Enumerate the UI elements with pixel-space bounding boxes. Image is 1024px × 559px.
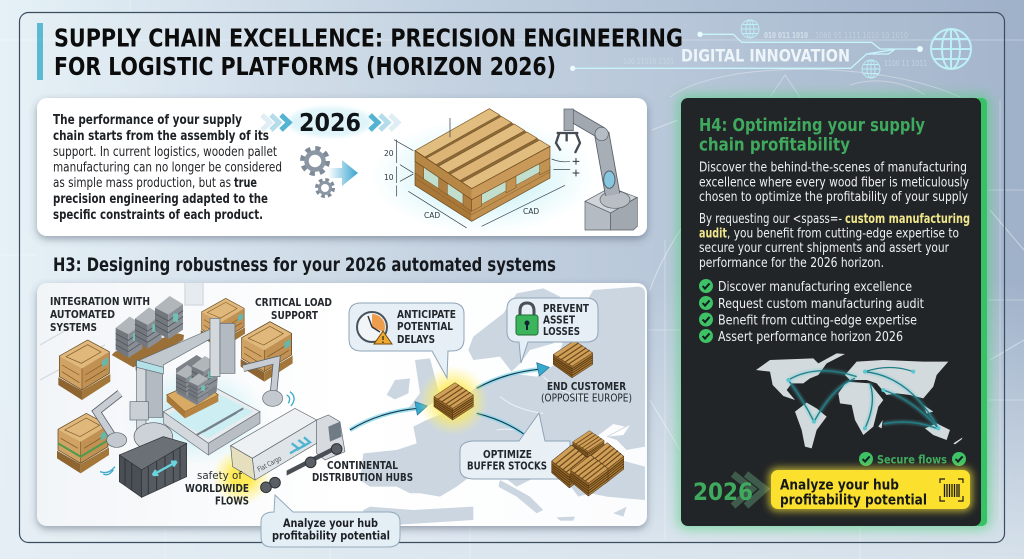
right robot base	[263, 390, 283, 406]
call to action button: Analyze your hub	[780, 478, 899, 494]
dimension labels: 20	[384, 149, 394, 158]
label: continental distribution hubs: DISTRIBUTION HUBS	[312, 472, 413, 484]
left robot base	[107, 433, 127, 447]
intro text block: manufacturing can no longer be considered	[53, 160, 282, 176]
paragraph: audit: performance for the 2026 horizon.	[699, 256, 884, 271]
green year 2026: 2026	[693, 478, 753, 506]
intro text block: The performance of your supply	[53, 112, 242, 128]
yellow glow behind truck	[212, 448, 272, 505]
checklist: Benefit from cutting-edge expertise	[718, 314, 917, 328]
paragraph: audit: , you benefit from cutting-edge expertise to	[727, 226, 959, 242]
label: end customer: (OPPOSITE EUROPE)	[541, 392, 632, 404]
paragraph: audit: custom manufacturing	[845, 212, 970, 227]
buffer stock pallets	[552, 431, 624, 496]
paragraph: audit	[699, 212, 970, 271]
robot arm	[556, 109, 637, 230]
paragraph: audit: secure your current shipments and assert your	[699, 241, 950, 256]
dimension labels: CAD	[424, 211, 440, 220]
label: continental distribution hubs: CONTINENTAL	[327, 460, 398, 472]
icon: barcode	[940, 479, 963, 501]
dimension labels: CAD	[523, 207, 539, 216]
heading H4: H4: Optimizing your supply	[699, 115, 925, 136]
intro text block: precision engineering adapted to the	[53, 191, 268, 207]
callout: optimize buffer stocks: OPTIMIZE	[483, 449, 532, 461]
paragraph: discover: excellence where every wood fiber is meticulously	[699, 176, 969, 190]
hub pallet with glow	[418, 366, 488, 436]
conveyor frame	[163, 387, 260, 455]
intro text block: support. In current logistics, wooden pallet	[53, 144, 277, 160]
callout: optimize buffer stocks: BUFFER STOCKS	[467, 460, 547, 472]
wifi icons	[100, 392, 294, 475]
digital innovation banner: 100 11010 1101	[623, 57, 674, 66]
intro text block: specific constraints of each product.	[53, 207, 263, 223]
end customer pallet	[553, 340, 593, 378]
panel: intro pallet engineering	[37, 98, 647, 236]
label: integration with automated systems: INTEGRATION WITH	[50, 296, 150, 308]
secure flows badge: Secure flows	[877, 452, 947, 466]
callout: analyze hub profitability: profitability potential	[272, 528, 390, 542]
label: safety of worldwide flows: FLOWS	[215, 496, 249, 508]
callout: anticipate potential delays: ANTICIPATE	[397, 309, 456, 321]
callout: prevent asset losses: ASSET	[543, 314, 576, 326]
intro text block: chain starts from the assembly of its	[53, 128, 269, 144]
callout: prevent asset losses: LOSSES	[543, 326, 580, 338]
label: end customer: END CUSTOMER	[547, 381, 626, 393]
icon: clock with warning	[357, 312, 392, 344]
gray goods pallet	[112, 296, 184, 367]
digital innovation banner: 010 011 1010	[764, 31, 808, 40]
label: critical load support: CRITICAL LOAD	[255, 297, 332, 309]
label: integration with automated systems: SYSTEMS	[50, 322, 97, 334]
label: critical load support	[255, 297, 332, 322]
europe map	[360, 287, 645, 525]
label: integration with automated systems: AUTOMATED	[50, 309, 115, 321]
dimension labels: 10	[384, 173, 394, 182]
wooden pallet technical drawing	[370, 109, 597, 235]
panel: H4 profitability	[678, 95, 990, 529]
callout: analyze hub profitability	[261, 495, 400, 547]
callout: anticipate potential delays: DELAYS	[397, 334, 435, 346]
digital innovation banner: 1100 11 1011	[884, 59, 927, 68]
paragraph: audit: By requesting our <spass=-	[699, 212, 842, 227]
digital innovation banner: DIGITAL INNOVATION	[681, 46, 850, 66]
heading H4	[699, 115, 925, 156]
label: critical load support: SUPPORT	[271, 310, 319, 322]
title: SUPPLY CHAIN EXCELLENCE: PRECISION ENGINEERING	[54, 24, 683, 52]
call to action button	[769, 468, 972, 511]
digital innovation banner: 1060 01 1111 1010 10 1010	[815, 31, 908, 40]
callout: prevent asset losses	[507, 298, 598, 363]
callout: prevent asset losses: PREVENT	[543, 303, 590, 315]
label: integration with automated systems	[50, 296, 150, 334]
intro text block	[53, 112, 282, 223]
callout: anticipate potential delays: POTENTIAL	[397, 321, 453, 333]
checklist: Discover manufacturing excellence	[718, 280, 912, 295]
panel: automated systems and european flows	[37, 283, 647, 526]
faint warehouse walls	[40, 283, 203, 380]
paragraph: audit: audit	[699, 226, 727, 242]
heading H3: H3: Designing robustness for your 2026 automated systems	[53, 254, 556, 276]
checklist	[699, 279, 924, 345]
truck label: Flat Cargo	[256, 454, 283, 474]
icon: padlock	[516, 303, 538, 335]
right robot arm	[243, 360, 277, 395]
title: FOR LOGISTIC PLATFORMS (HORIZON 2026)	[54, 52, 556, 81]
intro text block: true	[234, 175, 257, 191]
label: safety of worldwide flows	[185, 469, 249, 508]
digital innovation banner	[570, 20, 971, 78]
intro text block: as simple mass production, but as	[53, 175, 231, 191]
crate back	[201, 298, 245, 349]
year 2026 with chevrons: 2026	[299, 108, 361, 137]
automated warehouse scene	[57, 296, 345, 505]
central loaded pallet	[167, 355, 218, 418]
title	[37, 23, 683, 81]
year 2026 with chevrons	[262, 107, 398, 137]
left robot arm	[97, 393, 120, 440]
label: end customer	[541, 381, 632, 404]
gantry	[130, 318, 235, 451]
label: safety of worldwide flows: safety of	[197, 469, 243, 482]
checklist: Request custom manufacturing audit	[718, 297, 924, 312]
checklist: Assert performance horizon 2026	[718, 330, 903, 345]
callout: analyze hub profitability: Analyze your hub	[283, 516, 378, 530]
paragraph: discover: Discover the behind-the-scenes of manufacturing	[699, 160, 967, 176]
call to action button: profitability potential	[780, 492, 927, 508]
world map with flows	[756, 353, 963, 448]
icon: gears and arrow	[302, 148, 358, 196]
delivery truck	[231, 408, 345, 493]
callout: optimize buffer stocks	[460, 413, 570, 479]
crates	[58, 340, 110, 400]
heading H4: chain profitability	[699, 134, 850, 156]
flow arrows	[350, 363, 549, 440]
label: safety of worldwide flows: WORLDWIDE	[185, 483, 249, 495]
paragraph: discover	[699, 160, 969, 205]
paragraph: discover: chosen to optimize the profitability of your supply	[699, 190, 968, 205]
callout: anticipate potential delays	[349, 303, 464, 378]
shipping container	[119, 437, 187, 497]
dimension labels	[384, 149, 539, 220]
label: continental distribution hubs	[312, 460, 413, 484]
